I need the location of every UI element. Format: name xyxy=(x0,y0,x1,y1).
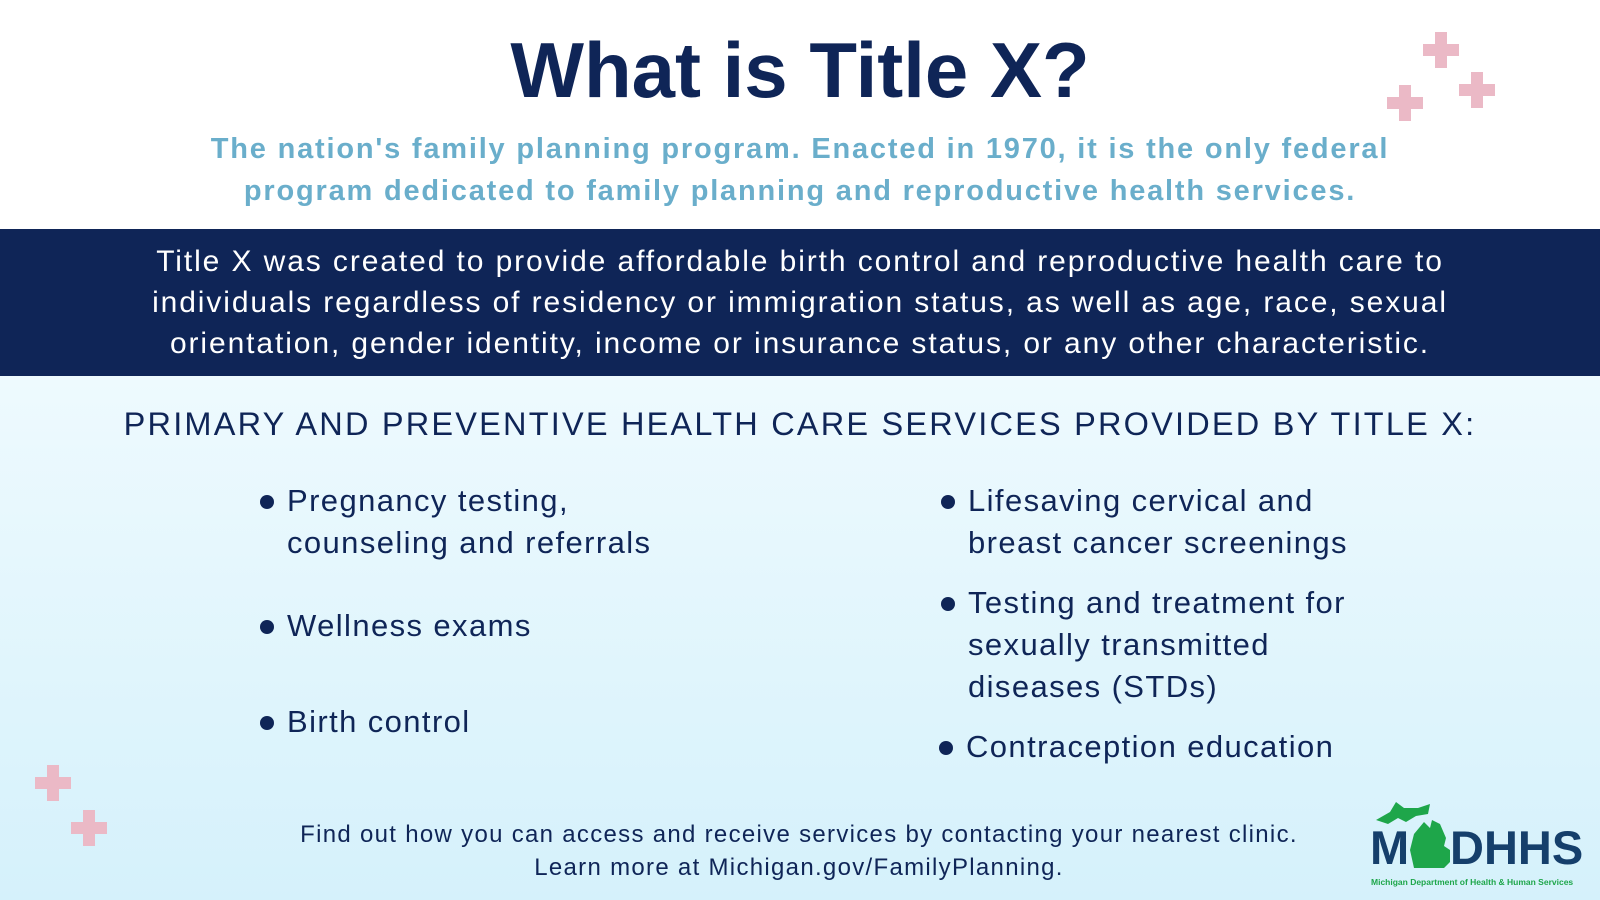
bullet: wellness: Wellness exams xyxy=(287,608,532,643)
bullet: cancer screenings: breast cancer screenings xyxy=(968,525,1348,560)
bullet: STDs xyxy=(968,582,1346,708)
bullet: contraception: Contraception education xyxy=(966,729,1334,764)
logo: MDHHS: Michigan Department of Health & Human Services xyxy=(1371,877,1573,887)
footer text xyxy=(300,821,1298,881)
bullet: cancer screenings: Lifesaving cervical and xyxy=(968,483,1314,518)
logo: MDHHS xyxy=(1370,802,1583,887)
michigan shape xyxy=(1376,802,1450,868)
band text: Title X was created to provide affordable birth control and reproductive health care to individuals regardless of residency or immigration status, as well as age, race, sexual orientation, gender identity, income or insurance status, or any other characteristic. xyxy=(152,245,1448,360)
icon: crosses bottom left xyxy=(35,765,107,846)
logo: MDHHS: M xyxy=(1370,821,1409,874)
title: What is Title X? xyxy=(510,26,1090,114)
logo: MDHHS: DHHS xyxy=(1450,821,1583,874)
bullet: pregnancy: counseling and referrals xyxy=(287,525,651,560)
list left xyxy=(260,483,651,739)
heading: services: PRIMARY AND PREVENTIVE HEALTH CARE SERVICES PROVIDED BY TITLE X: xyxy=(124,406,1476,442)
bullet: STDs: Testing and treatment for xyxy=(968,585,1346,620)
icon: crosses top right xyxy=(1387,32,1495,121)
footer text: Learn more at Michigan.gov/FamilyPlanning. xyxy=(534,854,1064,881)
list right xyxy=(939,483,1348,764)
bullet: pregnancy: Pregnancy testing, xyxy=(287,483,569,518)
bullet: pregnancy xyxy=(287,480,651,564)
bullet: cancer screenings xyxy=(968,480,1348,564)
bullet: STDs: sexually transmitted xyxy=(968,627,1270,662)
navy band xyxy=(0,229,1600,376)
subtitle: The nation's family planning program. Enacted in 1970, it is the only federal program dedicated to family planning and reproductive health services. xyxy=(211,133,1389,207)
bullet: STDs: diseases (STDs) xyxy=(968,669,1218,704)
footer text: Find out how you can access and receive services by contacting your nearest clinic. xyxy=(300,821,1298,848)
lower background xyxy=(0,376,1600,900)
bullet: birth control: Birth control xyxy=(287,704,471,739)
